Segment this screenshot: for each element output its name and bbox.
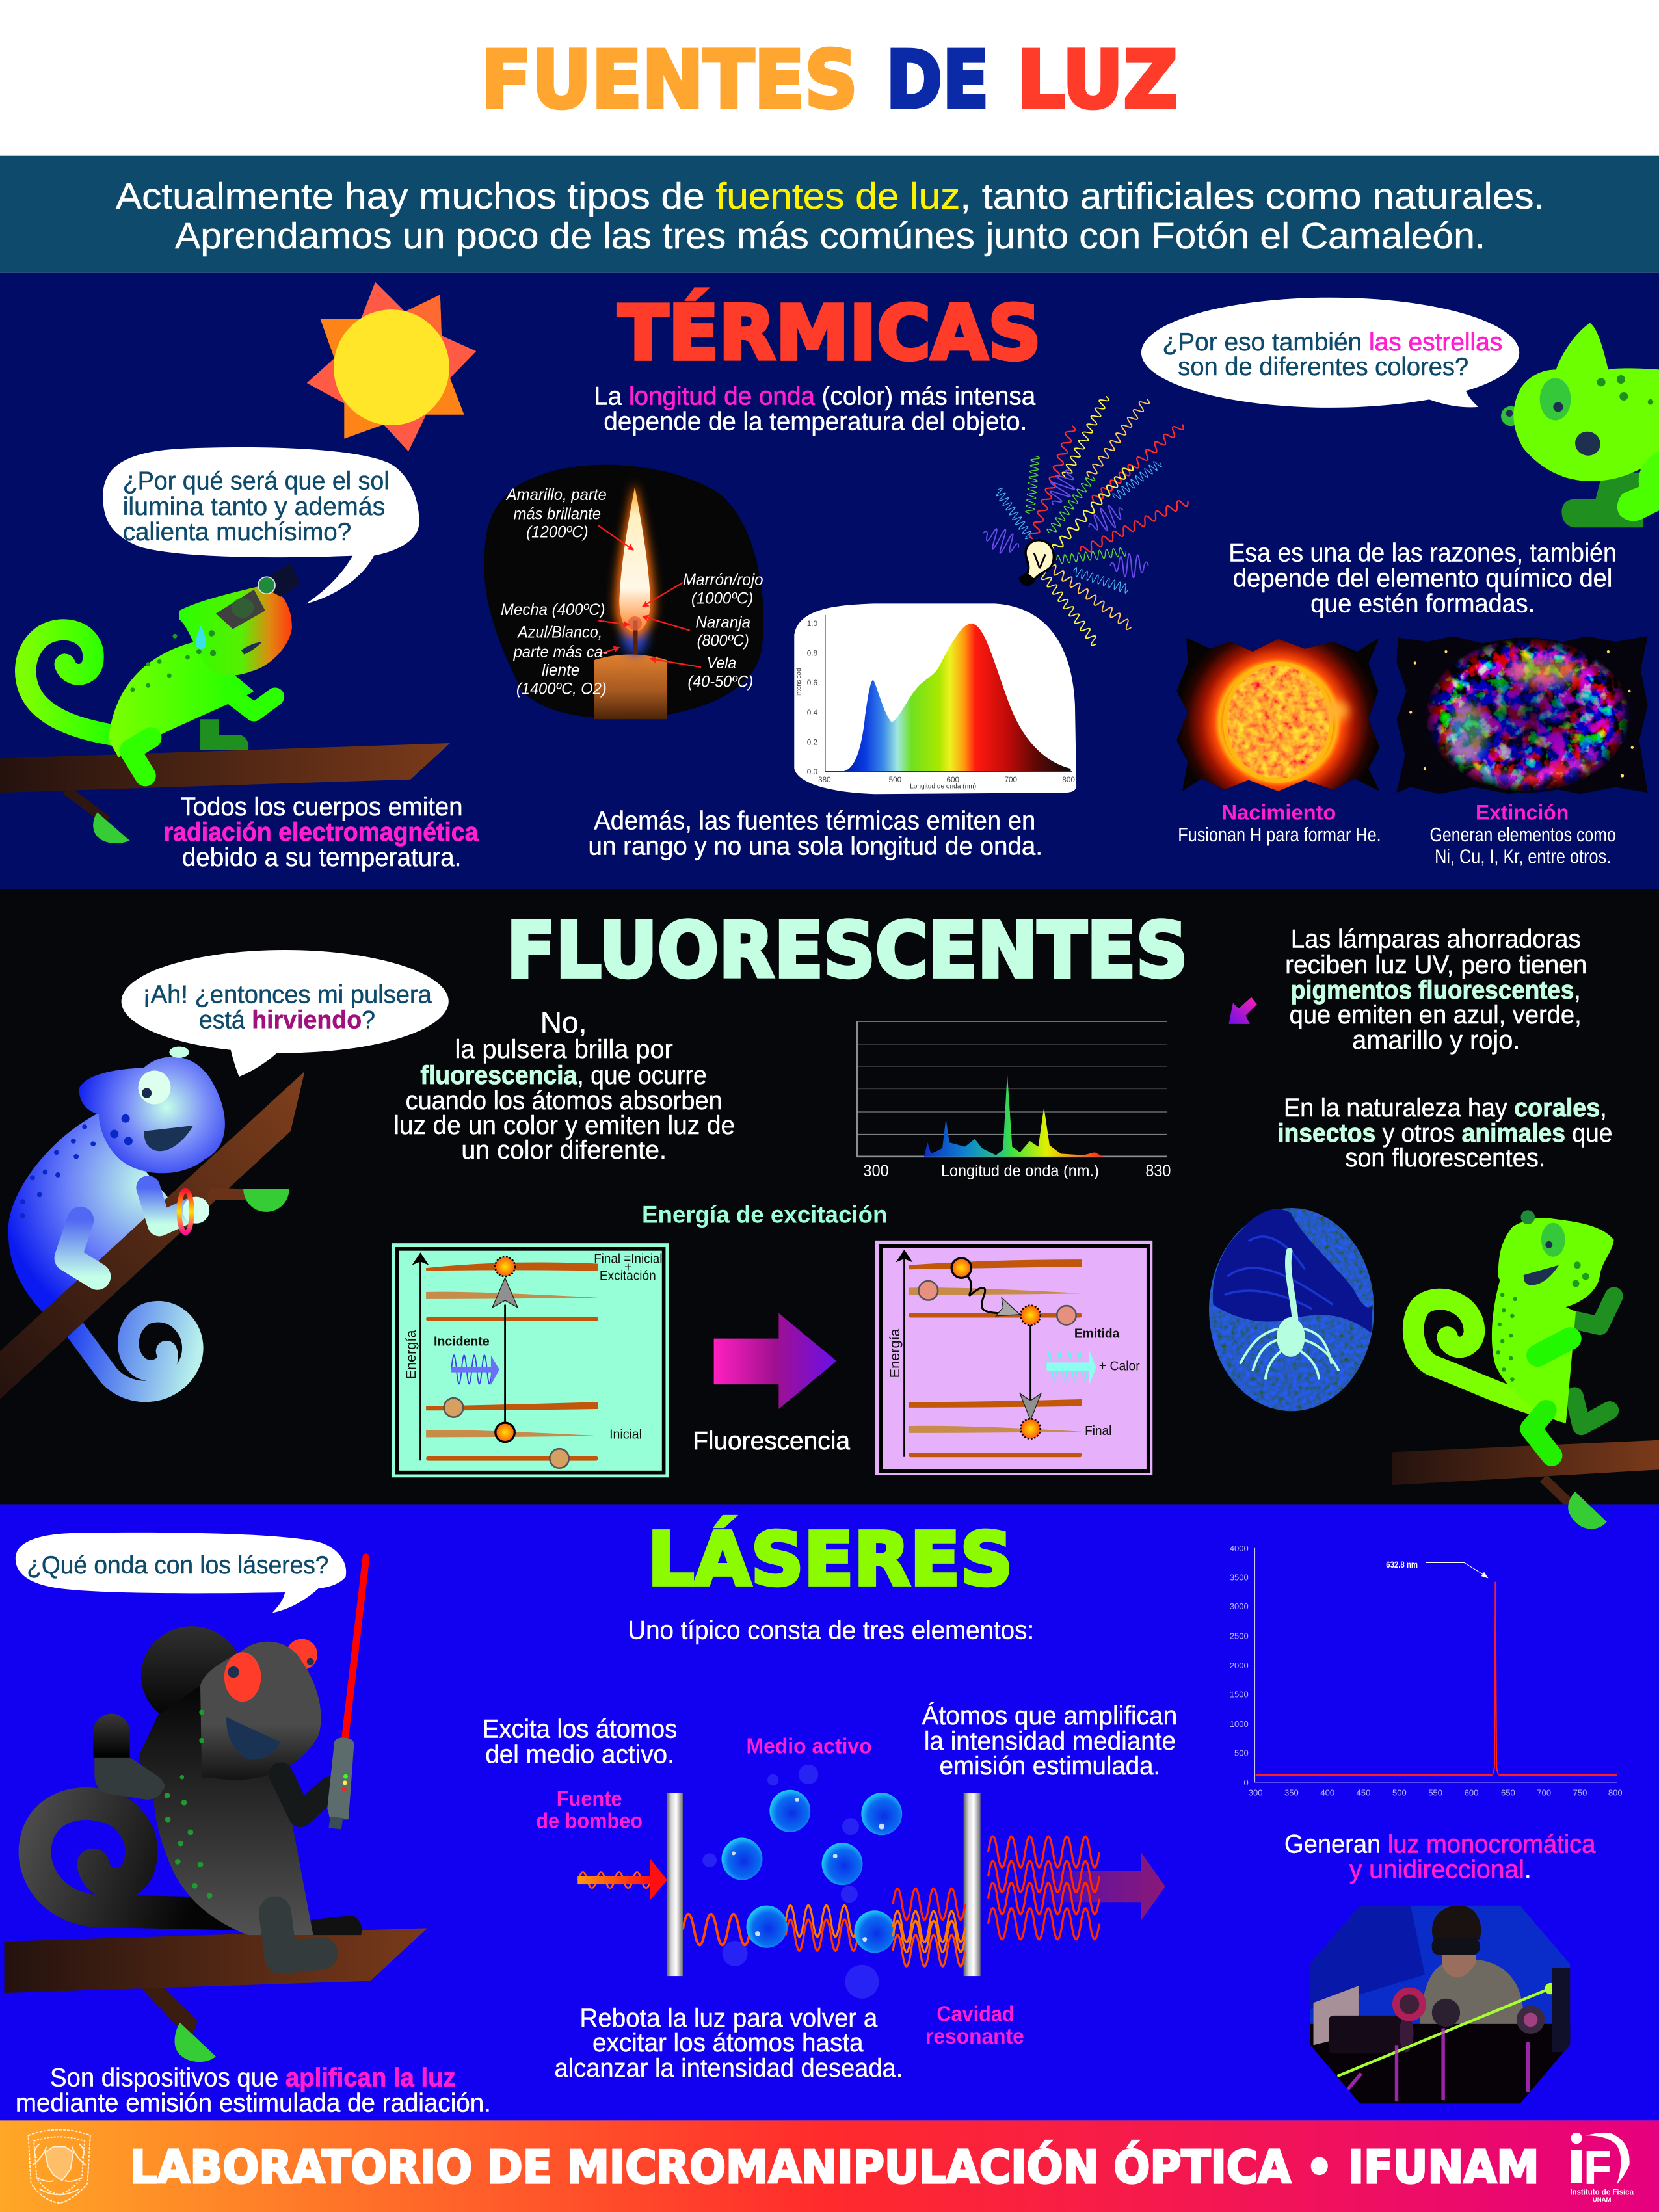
line: no: No, [540,1006,587,1039]
chart: laser spectrum: 500 [1234,1748,1249,1758]
bubble text: ¿Qué onda con los láseres? [27,1551,328,1579]
panel: fluorescentes [0,889,1659,1512]
chart: laser spectrum: 3500 [1230,1573,1249,1583]
line 3: que estén formadas. [1310,588,1535,618]
icon: sun [307,282,476,451]
diagram: excitation: + [624,1260,632,1275]
chart: fluorescent spectrum: Longitud de onda (nm.) [941,1162,1099,1180]
line 2: y unidireccional. [1349,1854,1532,1884]
chart: laser spectrum: 1500 [1230,1690,1249,1700]
line 2: un rango y no una sola longitud de onda. [589,832,1042,861]
label: fuente de bombeo [536,1787,643,1833]
text: naturaleza [1277,1093,1612,1172]
chart: laser spectrum: 550 [1428,1787,1442,1797]
bubble line 2: son de diferentes colores? [1178,353,1468,381]
arrow: fluorescencia [714,1313,836,1409]
output arrow [1035,1852,1165,1920]
chart: laser spectrum: 2500 [1230,1631,1249,1641]
logo: instituto de fisica: F [1584,2142,1611,2194]
line 3: son fluorescentes. [1345,1143,1545,1172]
bubble text line 2: ilumina tanto y además [123,493,385,521]
waves amplified [893,1889,965,1966]
chart: laser spectrum: 500 [1392,1787,1407,1797]
text: excita [483,1714,677,1769]
leaf from upper branch [1568,1492,1607,1529]
chart: fluorescent spectrum [857,1021,1171,1180]
diagram: emission: Final [1085,1423,1111,1438]
diagram: excitation: Energía [403,1330,419,1380]
chart: fluorescent spectrum: 300 [864,1162,889,1180]
logo: instituto de fisica: UNAM [1593,2196,1611,2204]
label: Extinción [1476,800,1569,824]
label: medio activo: Medio activo [747,1734,872,1758]
line 1: Átomos que amplifican [922,1701,1177,1730]
candle flame photo with labels: (1400ºC, O2) [516,679,607,698]
candle flame photo with labels: más brillante [514,505,601,523]
title band [0,0,1659,156]
bubble line 1: ¡Ah! ¿entonces mi pulsera [142,981,432,1008]
line 3: pigmentos fluorescentes, [1291,975,1581,1005]
logo: instituto de fisica: Instituto de Física [1570,2187,1634,2196]
line 2: depende del elemento químico del [1233,563,1612,592]
chart: thermal spectrum: 700 [1004,776,1018,784]
intro line 1: Actualmente hay muchos tipos de fuentes de luz , tanto artificiales como naturales. [116,176,1545,217]
caption: extincion [1430,800,1616,868]
line 1: Rebota la luz para volver a [580,2003,878,2033]
text: uno tipico: Uno típico consta de tres elementos: [628,1616,1034,1645]
chart: laser spectrum: 700 [1537,1787,1551,1797]
candle flame photo with labels: Marrón/rojo [683,571,763,589]
line 3: emisión estimulada. [940,1751,1160,1780]
text: explicacion fluorescencia [393,1006,735,1165]
waves output [989,1836,1099,1940]
line 3: cuando los átomos absorben [406,1086,723,1115]
line 4: que emiten en azul, verde, [1290,1000,1582,1029]
label: fluorescencia: Fluorescencia [693,1427,850,1455]
diagram: excitation [392,1243,669,1477]
character: blue chameleon on branch [0,1047,305,1399]
photo: laser lab [1309,1906,1572,2104]
candle flame photo with labels: Azul/Blanco, [516,623,602,641]
line 1: Generan luz monocromática [1284,1829,1596,1858]
faint atoms [702,1765,879,1999]
footer title: LABORATORIO DE MICROMANIPULACIÓN ÓPTICA • IFUNAM [130,2140,1539,2194]
heading: energia de excitacion: Energía de excitación [642,1202,887,1228]
bubble text line 1: ¿Por qué será que el sol [123,467,390,495]
chart: thermal spectrum [794,603,1076,794]
chart: laser spectrum: 632.8 nm [1386,1560,1418,1570]
text: luz monocromatica [1284,1829,1596,1884]
chart: laser spectrum: 300 [1249,1787,1262,1797]
chart: thermal spectrum: 0.0 [807,768,818,776]
line 5: un color diferente. [461,1135,667,1165]
line 1: Excita los átomos [483,1714,677,1743]
title: fuentes: FUENTES [481,34,858,126]
chart: thermal spectrum: Intensidad [795,668,803,697]
diagram: excitation: Excitación [600,1269,656,1284]
branch with leaf [0,743,450,843]
label: cavidad resonante [925,2003,1024,2049]
line 1: la pulsera brilla por [455,1034,673,1064]
heading: laseres: LÁSERES [648,1516,1013,1602]
line 2: insectos y otros animales que [1277,1118,1612,1148]
description line 1: Generan elementos como [1430,824,1616,846]
pump arrow [577,1859,667,1900]
candle flame photo with labels: Vela [707,654,736,672]
line 1: Además, las fuentes térmicas emiten en [594,806,1035,836]
diagram: excitation: Final =Inicial [594,1252,662,1267]
text: rango [589,806,1042,861]
chart: laser spectrum: 600 [1465,1787,1478,1797]
diagram: laser cavity [577,1765,1165,1999]
intro banner [0,156,1659,273]
photo: star birth sun [1176,637,1380,791]
chart: laser spectrum: 3000 [1230,1601,1249,1611]
character: green chameleon with glasses [25,563,300,776]
description line 2: Ni, Cu, I, Kr, entre otros. [1435,847,1611,868]
chart: laser spectrum: 400 [1320,1787,1334,1797]
text: aplifican [16,2062,491,2117]
candle flame photo with labels: Amarillo, parte [505,486,607,504]
candle flame photo with labels: (1000ºC) [691,589,753,607]
candle flame photo with labels: Naranja [695,613,750,631]
chart: laser spectrum: 0 [1244,1778,1249,1787]
title: luz: LUZ [1017,34,1178,126]
line 2: reciben luz UV, pero tienen [1285,950,1587,979]
text: radiacion [164,792,479,872]
line 3: debido a su temperatura. [182,843,461,872]
diagram: excitation: Inicial [609,1427,642,1442]
line 1: Cavidad [936,2003,1015,2027]
bubble line 1: ¿Por eso también las estrellas [1162,328,1502,356]
speech bubble: sol [103,447,419,603]
atoms [722,1790,902,1953]
chart: laser spectrum: 350 [1284,1787,1299,1797]
text: rebota [555,2003,903,2083]
bubble line 2: está hirviendo? [199,1006,375,1034]
arrow: to spectrum [1228,997,1257,1024]
diagram: excitation: Incidente [434,1334,490,1349]
text: longitud de onda [594,382,1036,436]
text: atomos que amplifican [922,1701,1177,1780]
chart: thermal spectrum: 0.6 [807,679,817,687]
text: elemento quimico [1228,538,1617,618]
chart: thermal spectrum: 500 [889,776,902,784]
diagram: emission [875,1241,1152,1475]
line 2: excitar los átomos hasta [592,2028,864,2057]
line 1: Son dispositivos que aplifican la luz [50,2062,456,2092]
chart: laser spectrum: 4000 [1230,1544,1249,1553]
photo: fluorescent scorpion [1209,1208,1374,1411]
candle flame photo with labels: (800ºC) [697,632,749,650]
logo: instituto de fisica [1570,2133,1634,2204]
mirror left [667,1793,683,1976]
diagram: emission: Emitida [1074,1326,1120,1341]
chart: laser spectrum: 1000 [1230,1719,1249,1729]
line 1: Esa es una de las razones, también [1228,538,1617,567]
chart: laser spectrum: 800 [1608,1787,1623,1797]
line 2: fluorescencia, que ocurre [420,1060,707,1090]
caption: nacimiento [1178,800,1381,846]
panel: laseres [0,1492,1659,2120]
character: surprised green chameleon [1501,323,1659,527]
line 2: la intensidad mediante [924,1726,1176,1756]
speech bubble: estrellas [1141,298,1519,408]
candle flame photo with labels: liente [542,661,580,679]
speech bubble: pulsera [122,950,449,1077]
heading: termicas: TÉRMICAS [618,289,1041,377]
candle flame photo with labels: parte más ca- [513,643,608,661]
chart: laser spectrum: 450 [1357,1787,1370,1797]
heading: fluorescentes: FLUORESCENTES [507,906,1188,995]
line 1: Las lámparas ahorradoras [1291,925,1581,954]
candle flame photo with labels [484,465,763,719]
illustration: light bulb emitting waves [979,395,1189,647]
mirror right [964,1793,981,1976]
waves left [683,1906,858,1951]
logo: UNAM crest [28,2130,90,2203]
chart: thermal spectrum: 800 [1062,776,1075,784]
description: Fusionan H para formar He. [1178,824,1381,846]
speech bubble: laseres [16,1533,346,1613]
chart: laser spectrum: 650 [1501,1787,1515,1797]
line 2: radiación electromagnética [164,817,479,847]
line 2: de bombeo [536,1809,643,1833]
footer band [0,2120,1659,2212]
diagram: emission: Energía [886,1328,903,1378]
line 3: alcanzar la intensidad deseada. [555,2053,903,2083]
line 1: Fuente [557,1787,622,1811]
candle flame photo with labels: (40-50ºC) [687,672,753,691]
line 1: Todos los cuerpos emiten [181,792,463,821]
diagram: emission: + Calor [1099,1358,1140,1373]
chart: thermal spectrum: 0.4 [807,709,818,717]
bubble text line 3: calienta muchísimo? [123,518,351,546]
line 2: mediante emisión estimulada de radiación. [16,2088,491,2117]
character: dark chameleon with laser pointer [35,1557,366,1958]
chart: thermal spectrum: 0.8 [807,650,817,658]
panel: termicas [0,273,1659,889]
chart: thermal spectrum: Longitud de onda (nm) [910,783,976,791]
chart: fluorescent spectrum: 830 [1145,1162,1171,1180]
chart: thermal spectrum: 600 [947,776,960,784]
candle flame photo with labels: Mecha (400ºC) [501,601,605,619]
branch with leaf [5,1928,427,2062]
title: de: DE [886,34,989,126]
line 4: luz de un color y emiten luz de [393,1111,735,1140]
text: lamparas [1285,925,1587,1055]
intro line 2: Aprendamos un poco de las tres más comúnes junto con Fotón el Camaleón. [175,215,1485,256]
line 1: La longitud de onda (color) más intensa [594,382,1036,411]
line 5: amarillo y rojo. [1352,1025,1520,1055]
line 1: En la naturaleza hay corales, [1284,1093,1607,1122]
label: Nacimiento [1222,800,1336,824]
chart: thermal spectrum: 380 [818,776,831,784]
photo: supernova remnant [1397,636,1648,794]
line 2: depende de la temperatura del objeto. [604,407,1027,436]
line 2: del medio activo. [485,1740,674,1769]
chart: thermal spectrum: 0.2 [807,738,817,746]
character: green chameleon on branch [1392,1210,1659,1512]
chart: laser spectrum: 2000 [1230,1661,1249,1670]
chart: laser spectrum: 750 [1573,1787,1587,1797]
line 2: resonante [925,2025,1024,2049]
chart: thermal spectrum: 1.0 [807,620,818,628]
candle flame photo with labels: (1200ºC) [526,523,589,541]
chart: laser spectrum [1230,1544,1623,1797]
